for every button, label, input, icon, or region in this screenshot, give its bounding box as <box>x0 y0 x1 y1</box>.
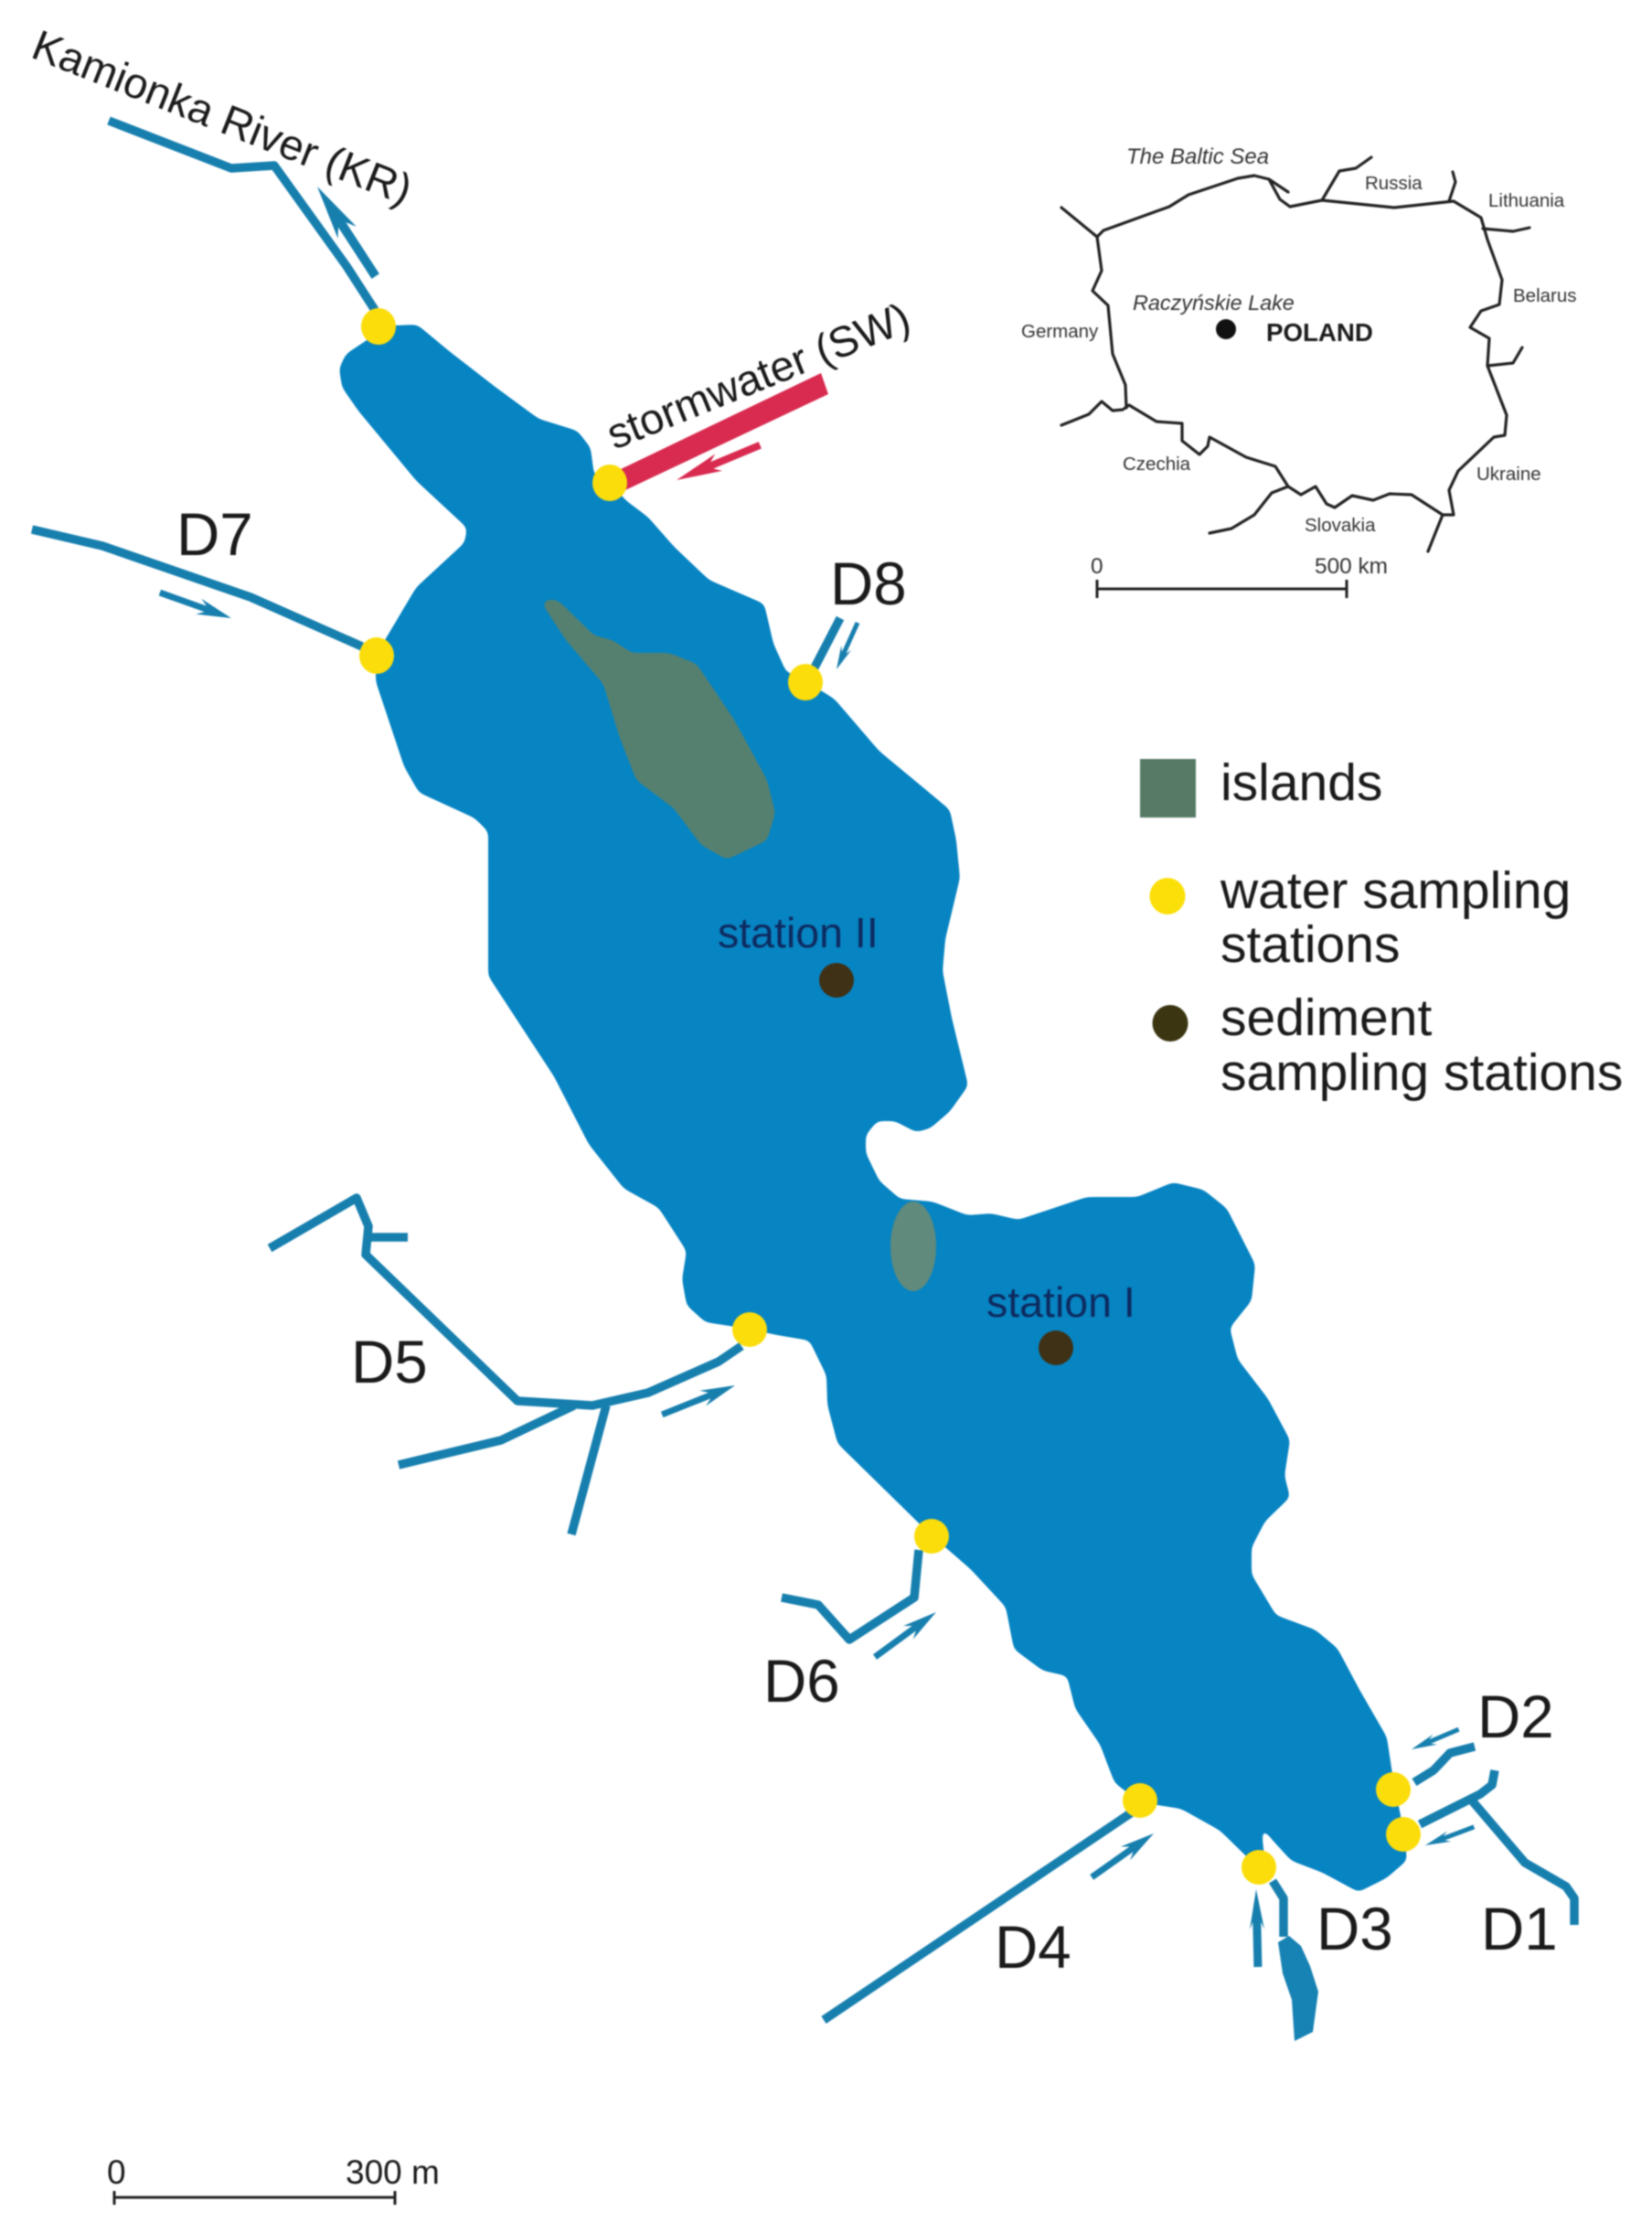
ditch D2 <box>1410 1725 1475 1782</box>
ditch labels: D6 <box>763 1648 840 1715</box>
ditch labels: D2 <box>1477 1683 1554 1750</box>
inset: labels: POLAND <box>1266 318 1373 347</box>
legend: islands swatch <box>1140 759 1196 818</box>
ditch D1 <box>1420 1770 1574 1925</box>
ditch labels: D8 <box>830 550 907 617</box>
Kamionka River <box>109 121 385 310</box>
legend: islands label: islands <box>1220 753 1382 812</box>
ditch labels: D4 <box>995 1914 1071 1981</box>
main scale bar: 300 m <box>346 2154 440 2191</box>
inset: scale bar: 0 <box>1091 554 1103 579</box>
ditch D4 <box>824 1812 1158 2020</box>
inset: labels: Slovakia <box>1305 515 1376 536</box>
label: Kamionka River: Kamionka River (KR) <box>26 20 419 214</box>
arrow: D1 flow <box>1423 1822 1476 1851</box>
island: small <box>890 1202 936 1291</box>
ditch D5 <box>270 1198 741 1534</box>
arrow: D7 flow <box>157 585 234 625</box>
legend: sediment station label: sediment <box>1220 989 1432 1047</box>
main scale bar <box>107 2154 440 2205</box>
legend: water station marker <box>1150 878 1185 914</box>
ditch labels: D5 <box>351 1329 428 1395</box>
arrow: D3 flow <box>1249 1889 1265 1967</box>
sediment station II <box>718 909 879 998</box>
main scale bar: 0 <box>107 2154 126 2191</box>
arrow: D8 flow <box>832 620 863 671</box>
legend: water station label: water sampling <box>1220 861 1571 920</box>
inset: location dot <box>1216 319 1236 339</box>
ditch D8 <box>815 618 863 671</box>
arrow: Kamionka River flow <box>308 180 385 283</box>
label: stormwater: stormwater (SW) <box>600 293 917 458</box>
ditch labels <box>176 501 1558 1981</box>
inset: labels <box>1021 144 1577 536</box>
inset map of Poland <box>1021 144 1577 598</box>
arrow: D6 flow <box>870 1606 941 1663</box>
inset: labels: Lithuania <box>1488 190 1565 211</box>
inset: labels: Russia <box>1365 173 1423 194</box>
stormwater pipe <box>619 373 828 490</box>
ditch D6 <box>782 1550 941 1663</box>
inset: scale bar: 500 km <box>1315 554 1388 579</box>
ditch labels: D3 <box>1316 1896 1393 1962</box>
arrow: stormwater flow <box>673 437 763 488</box>
inset: scale bar <box>1091 554 1388 598</box>
water sampling stations <box>359 308 1421 1885</box>
arrow: D5 flow <box>659 1378 738 1422</box>
lake body <box>340 326 1406 1891</box>
arrow: D2 flow <box>1410 1725 1461 1755</box>
inset: labels: Raczyńskie Lake <box>1133 291 1295 315</box>
inset: labels: Ukraine <box>1476 464 1541 485</box>
sediment station I <box>986 1278 1135 1365</box>
ditch D3 <box>1249 1881 1318 2041</box>
legend: sediment station label: sampling stations <box>1220 1043 1623 1102</box>
label: station II: station II <box>718 909 879 957</box>
inset: labels: Belarus <box>1513 285 1577 306</box>
inset: labels: The Baltic Sea <box>1126 144 1269 169</box>
label: station I: station I <box>986 1278 1135 1326</box>
inset: borders <box>1061 157 1529 551</box>
ditch labels: D1 <box>1481 1896 1558 1962</box>
legend <box>1140 753 1623 1102</box>
island: large <box>542 599 775 860</box>
inset: labels: Germany <box>1021 321 1099 342</box>
arrow: D4 flow <box>1087 1827 1158 1884</box>
legend: water station label: stations <box>1220 915 1400 974</box>
ditch D7 <box>32 529 362 647</box>
inset: labels: Czechia <box>1123 454 1191 475</box>
legend: sediment station marker <box>1152 1005 1188 1042</box>
ditch labels: D7 <box>176 501 253 568</box>
